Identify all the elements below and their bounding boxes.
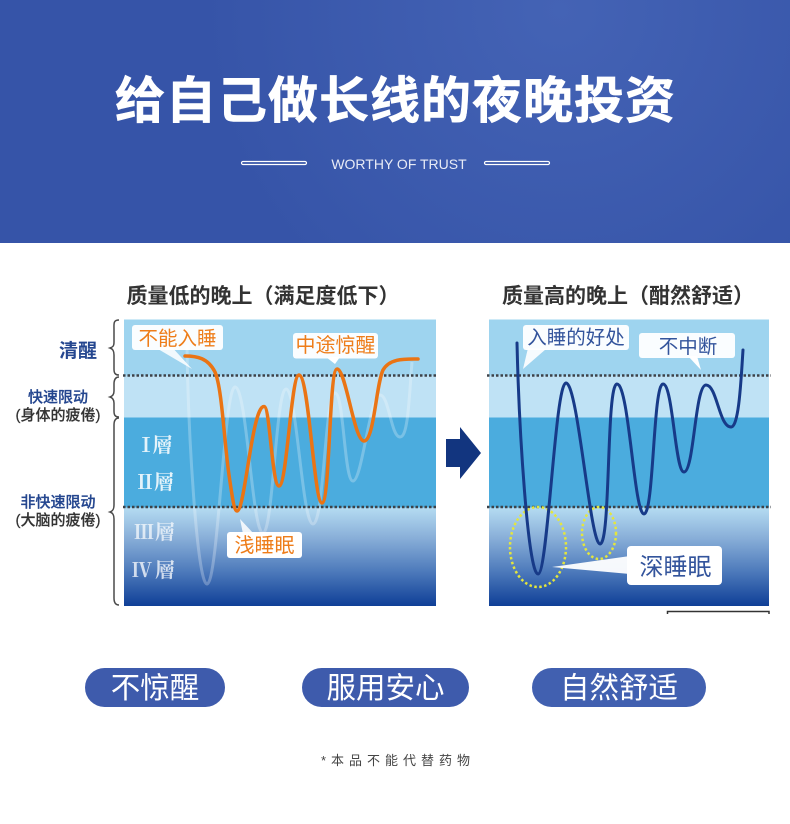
pill: natural comfort: 自然舒适 [560,672,678,705]
stage IV: 層 [155,559,175,582]
header background [0,0,790,243]
axis labels [16,340,100,529]
stage IV: Ⅳ [132,560,152,582]
stage I: 層 [152,434,172,457]
dotted thresholds [487,376,771,507]
callout: cannot fall asleep [132,325,223,369]
label: brain fatigue: (大脑的疲倦) [16,511,100,529]
callout: benefit of falling asleep [523,325,629,369]
callout: waking midway: 中途惊醒 [296,334,376,357]
pill: no waking: 不惊醒 [111,672,199,705]
callout: deep sleep: 深睡眠 [640,554,712,581]
yellow deep sleep markers [510,507,616,587]
arrow [446,427,481,479]
pill: peace of mind: 服用安心 [326,672,445,705]
panel: high quality sleep chart [487,320,771,606]
panel: low quality sleep chart [123,320,437,606]
orange sleep curve [185,356,418,511]
stage I: Ⅰ [136,435,156,457]
faint reference curve [187,345,412,584]
label: non-REM sleep: 非快速限动 [20,494,96,511]
right chart heading: 质量高的晚上（酣然舒适） [502,284,754,308]
subtitle with rules: WORTHY OF TRUST [331,156,467,172]
title: 给自己做长线的夜晚投资 [115,73,676,129]
stage III: Ⅲ [134,522,154,544]
braces [110,320,119,605]
callout: deep sleep [552,546,722,585]
label: awake: 清醒 [59,340,97,362]
callout: light sleep: 浅睡眠 [234,534,294,557]
stage II: Ⅱ [135,472,155,494]
stage III: 層 [155,521,175,544]
callout: light sleep [227,519,302,558]
pill: no waking [85,668,225,707]
callout: uninterrupted: 不中断 [659,336,717,358]
dotted thresholds [123,376,437,507]
label: REM sleep: 快速限动 [28,389,88,406]
stage labels [132,434,175,582]
footnote: *本品不能代替药物 [321,753,475,768]
pill: peace of mind [302,668,469,707]
callout: waking midway [293,333,378,364]
callout: cannot fall asleep: 不能入睡 [138,328,217,350]
navy sleep curve [517,343,743,574]
left chart heading: 质量低的晚上（满足度低下） [126,285,400,308]
subtitle with rules [242,156,550,172]
callout: uninterrupted [639,333,735,370]
cropped bracket under right chart [668,612,769,614]
label: body fatigue: (身体的疲倦) [16,406,100,424]
stage II: 層 [154,471,174,494]
pill: natural comfort [532,668,706,707]
callout: benefit of falling asleep: 入睡的好处 [527,327,625,349]
